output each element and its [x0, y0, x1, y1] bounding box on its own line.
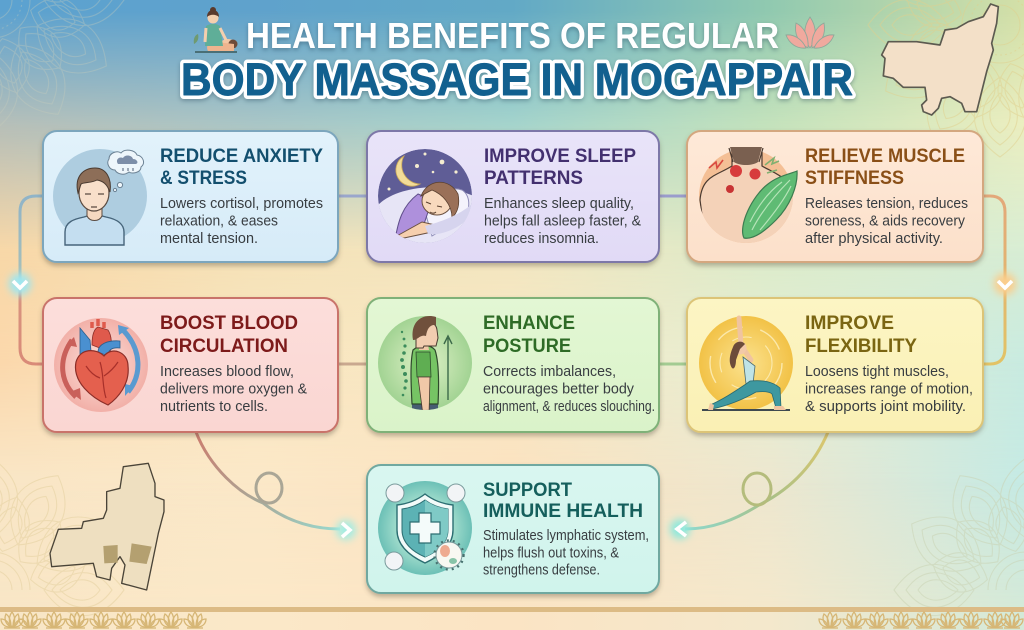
heading: IMPROVE SLEEP [484, 146, 636, 167]
body text [483, 528, 649, 578]
icon: heart [54, 318, 148, 412]
heading [483, 480, 643, 522]
icon: yoga pose [699, 316, 793, 410]
heading: IMPROVE [805, 313, 894, 334]
body text: Releases tension, reduces [805, 196, 968, 212]
body text: & supports joint mobility. [805, 399, 966, 415]
body text [805, 364, 973, 415]
lotus row right [819, 612, 1023, 628]
mandala top right [868, 0, 1024, 157]
title line 1: HEALTH BENEFITS OF REGULAR [246, 15, 779, 56]
body text: soreness, & aids recovery [805, 214, 966, 230]
body text: alignment, & reduces slouching. [483, 399, 655, 415]
body text: helps flush out toxins, & [483, 546, 619, 562]
body text: reduces insomnia. [484, 231, 599, 247]
arrow: chevron right [994, 273, 1016, 295]
body text: Lowers cortisol, promotes [160, 196, 323, 212]
heading: SUPPORT [483, 480, 572, 501]
title line 2: BODY MASSAGE IN MOGAPPAIR [181, 54, 853, 105]
mandala bottom right [894, 458, 1024, 616]
heading [805, 313, 917, 357]
body text: Stimulates lymphatic system, [483, 528, 649, 544]
connector: row one left [338, 194, 367, 198]
heading: REDUCE ANXIETY [160, 146, 323, 167]
panel: improve flexibility [687, 298, 983, 432]
body text: delivers more oxygen & [160, 382, 307, 398]
body text: nutrients to cells. [160, 399, 268, 415]
body text: relaxation, & eases [160, 214, 278, 230]
body text: Enhances sleep quality, [484, 196, 634, 212]
heading: CIRCULATION [160, 336, 288, 357]
title [181, 15, 853, 105]
icon: stressed person [53, 149, 147, 245]
heading: BOOST BLOOD [160, 313, 298, 334]
body text: after physical activity. [805, 231, 943, 247]
body text: increases range of motion, [805, 382, 973, 398]
heading [805, 146, 965, 189]
heading: PATTERNS [484, 168, 583, 189]
mandala bottom left [0, 458, 124, 616]
heading: POSTURE [483, 336, 571, 357]
connector: row two right [659, 362, 687, 366]
body text: Corrects imbalances, [483, 364, 616, 380]
lotus row left [1, 612, 206, 628]
body text: Increases blood flow, [160, 364, 294, 380]
heading: ENHANCE [483, 313, 575, 334]
arrow: curve to immune card from right [670, 432, 828, 539]
body text [483, 364, 655, 415]
body text: helps fall asleep faster, & [484, 214, 641, 230]
heading: & STRESS [160, 168, 247, 189]
connector: row one right [659, 194, 687, 198]
heading [160, 146, 323, 189]
connector: right flow [982, 196, 1005, 364]
heading [160, 313, 298, 357]
panel: reduce anxiety [43, 131, 338, 262]
icon: sleeping woman [378, 149, 474, 250]
heading [483, 313, 575, 357]
body text: strengthens defense. [483, 562, 600, 578]
heading: IMMUNE HEALTH [483, 501, 643, 522]
body text [484, 196, 641, 247]
panel: support immune health [367, 465, 659, 593]
icon: back and muscle [699, 146, 797, 245]
panel: improve sleep [367, 131, 659, 262]
connector: row two left [338, 362, 367, 366]
icon: shield [378, 481, 472, 575]
title icon: massage therapist [194, 7, 238, 52]
arrow: curve to immune card from left [196, 432, 356, 540]
heading: STIFFNESS [805, 168, 904, 189]
connector: left flow [20, 196, 44, 364]
map bottom left [50, 463, 164, 590]
body text [805, 196, 968, 247]
mandala top left [0, 0, 124, 132]
panel: enhance posture [367, 298, 659, 432]
body text [160, 364, 307, 415]
body text: mental tension. [160, 231, 258, 247]
body text: encourages better body [483, 382, 635, 398]
body text [160, 196, 323, 247]
heading: FLEXIBILITY [805, 336, 917, 357]
title line 2: BODY MASSAGE IN MOGAPPAIR [181, 54, 853, 105]
arrow: chevron left [9, 273, 31, 295]
panel: relieve muscle stiffness [687, 131, 983, 262]
bottom border band [0, 607, 1024, 612]
panel: boost blood circulation [43, 298, 338, 432]
map top right [882, 4, 998, 115]
icon: posture profile [378, 316, 472, 416]
heading: RELIEVE MUSCLE [805, 146, 965, 167]
body text: Loosens tight muscles, [805, 364, 949, 380]
heading [484, 146, 636, 189]
title icon: lotus [786, 17, 834, 48]
